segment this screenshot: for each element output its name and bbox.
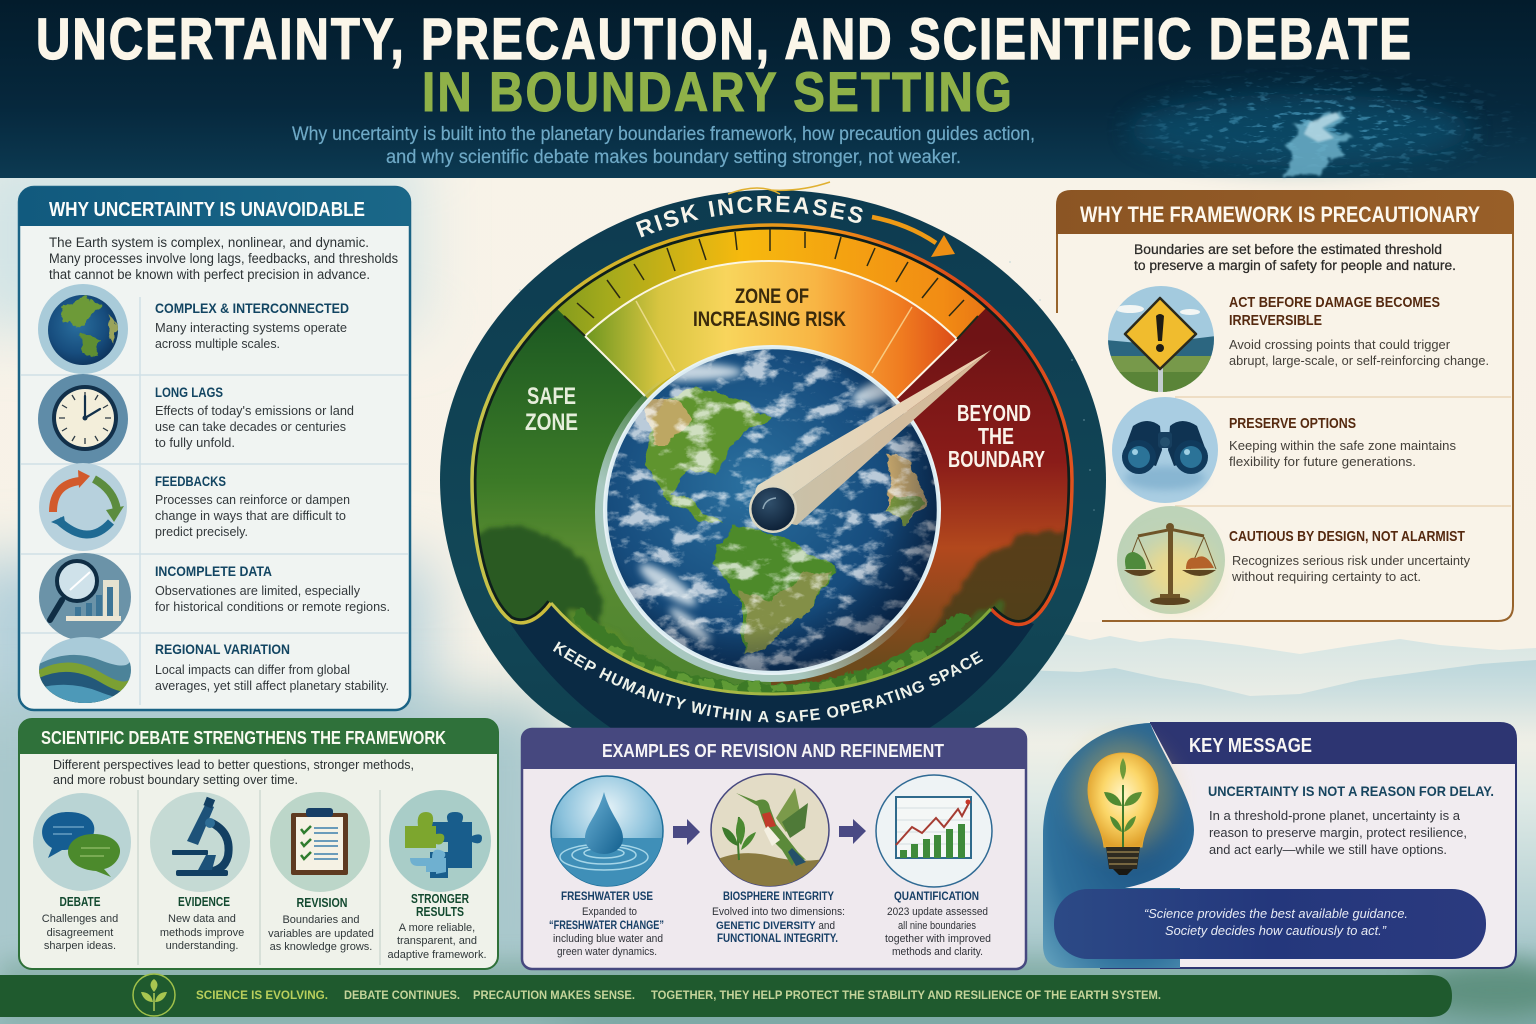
biosphere integrity text: BIOSPHERE INTEGRITY	[723, 889, 834, 903]
label: beyond the boundary: BEYOND	[957, 400, 1031, 426]
icon: clock	[38, 374, 128, 464]
icon: hummingbird	[711, 774, 830, 890]
label: beyond the boundary: THE	[978, 423, 1014, 449]
panel: examples of revision and refinement	[522, 729, 1026, 969]
biosphere integrity text: FUNCTIONAL INTEGRITY.	[717, 931, 838, 945]
gauge zones	[474, 226, 1070, 686]
biosphere integrity text: Evolved into two dimensions:	[712, 906, 845, 918]
quote pill: “Science provides the best available guidance.	[1144, 906, 1408, 921]
label: safe zone: ZONE	[525, 409, 578, 436]
revision text: REVISION	[296, 895, 348, 910]
precaution intro: to preserve a margin of safety for people and nature.	[1134, 258, 1456, 273]
left blue blob	[1043, 723, 1194, 968]
icon: balance scales	[1117, 506, 1225, 614]
revision text: as knowledge grows.	[270, 941, 372, 953]
precaution intro	[1134, 242, 1456, 273]
uncertainty intro: Many processes involve long lags, feedbacks, and thresholds	[49, 251, 398, 266]
uncertainty header	[19, 187, 410, 226]
quote pill: Society decides how cautiously to act.”	[1165, 923, 1387, 938]
icon: magnifier over data	[39, 553, 131, 641]
quantification text: all nine boundaries	[898, 920, 976, 932]
precaution intro: Boundaries are set before the estimated threshold	[1134, 242, 1442, 257]
debate text: disagreement	[47, 927, 113, 939]
icon: light bulb with sprout	[1073, 739, 1173, 875]
act before damage text: ACT BEFORE DAMAGE BECOMES	[1229, 294, 1440, 311]
freshwater use text: green water dynamics.	[557, 946, 657, 958]
long lags text: Effects of today's emissions or land	[155, 403, 354, 418]
icon: warning sign	[1105, 286, 1217, 396]
complex and interconnected text: Many interacting systems operate	[155, 320, 347, 335]
earth globe	[595, 342, 947, 682]
act before damage text: IRREVERSIBLE	[1229, 312, 1322, 329]
stronger results text: transparent, and	[397, 935, 477, 947]
icon: puzzle pieces	[389, 790, 491, 892]
stronger results text: adaptive framework.	[387, 949, 487, 961]
act before damage text	[1229, 294, 1489, 368]
precaution header	[1056, 190, 1514, 234]
debate intro: and more robust boundary setting over time.	[53, 772, 298, 787]
arrow: water to biosphere	[673, 819, 700, 845]
subtitle: Why uncertainty is built into the planetary boundaries framework, how precaution guides action,	[292, 124, 1035, 145]
evidence text: EVIDENCE	[178, 894, 230, 909]
panel: scientific debate strengthens the framework	[19, 719, 498, 969]
scribble mark above dial	[728, 182, 830, 194]
examples header: EXAMPLES OF REVISION AND REFINEMENT	[602, 741, 944, 761]
act before damage text: Avoid crossing points that could trigger	[1229, 337, 1451, 352]
label: beyond the boundary: BOUNDARY	[948, 446, 1045, 472]
stronger results text: RESULTS	[416, 904, 464, 919]
debate header	[19, 719, 498, 754]
long lags text: LONG LAGS	[155, 384, 223, 400]
debate text: Challenges and	[42, 913, 118, 925]
preserve options text: flexibility for future generations.	[1229, 454, 1416, 469]
safe zone sector	[476, 310, 771, 685]
revision text	[268, 895, 374, 953]
arrow: risk direction	[872, 217, 955, 257]
regional variation text: Local impacts can differ from global	[155, 662, 350, 677]
complex and interconnected text: COMPLEX & INTERCONNECTED	[155, 300, 349, 316]
key message body: and act early—while we still have options.	[1209, 842, 1447, 857]
quantification text	[885, 889, 991, 958]
quantification text: QUANTIFICATION	[894, 889, 979, 903]
icon: layered landscape	[39, 637, 131, 703]
feedbacks text: FEEDBACKS	[155, 473, 226, 489]
gauge lower rim	[551, 603, 991, 694]
freshwater use text	[549, 889, 664, 958]
biosphere integrity text	[712, 889, 845, 945]
incomplete data text: INCOMPLETE DATA	[155, 563, 272, 579]
beyond the boundary sector	[771, 308, 1068, 686]
evidence text: New data and	[168, 913, 236, 925]
needle hub	[749, 485, 797, 533]
uncertainty intro: that cannot be known with perfect precision in advance.	[49, 267, 370, 282]
key message body: In a threshold-prone planet, uncertainty is a	[1209, 808, 1461, 823]
freshwater use text: “FRESHWATER CHANGE”	[549, 918, 664, 932]
evidence text: understanding.	[166, 940, 238, 952]
gauge tick marks	[577, 228, 964, 318]
forest foreground	[575, 612, 965, 690]
long lags text: use can take decades or centuries	[155, 419, 346, 434]
regional variation text: averages, yet still affect planetary stability.	[155, 678, 389, 693]
label: zone of increasing risk	[693, 285, 846, 331]
biosphere integrity text: GENETIC DIVERSITY and	[716, 920, 835, 932]
icon: feedback loop	[39, 463, 127, 551]
cautious by design text: Recognizes serious risk under uncertainty	[1232, 553, 1470, 568]
regional variation text: REGIONAL VARIATION	[155, 641, 290, 657]
evidence text	[160, 894, 244, 952]
incomplete data text: Observationes are limited, especially	[155, 583, 360, 598]
key message header: KEY MESSAGE	[1189, 735, 1312, 757]
act before damage text: abrupt, large-scale, or self-reinforcing change.	[1229, 353, 1489, 368]
panel: key message	[1043, 723, 1516, 968]
icon: binoculars	[1112, 397, 1218, 503]
heading: risk increases: RISK INCREASES	[636, 196, 863, 238]
freshwater use text: FRESHWATER USE	[561, 889, 653, 903]
subtitle	[292, 124, 1035, 168]
examples header	[522, 729, 1026, 769]
freshwater use text: Expanded to	[582, 906, 637, 918]
uncertainty intro: The Earth system is complex, nonlinear, and dynamic.	[49, 235, 369, 250]
key message header	[1150, 723, 1516, 764]
key message body	[1209, 808, 1467, 857]
label: safe zone	[525, 383, 578, 436]
preserve options text: Keeping within the safe zone maintains	[1229, 438, 1456, 453]
caption: keep humanity within a safe operating space: KEEP HUMANITY WITHIN A SAFE OPERATING SPACE	[552, 641, 983, 722]
title	[36, 7, 1413, 123]
debate text: sharpen ideas.	[44, 940, 116, 952]
revision text: variables are updated	[268, 928, 374, 940]
regional variation text	[155, 641, 389, 693]
key message heading: UNCERTAINTY IS NOT A REASON FOR DELAY.	[1208, 783, 1494, 799]
incomplete data text: for historical conditions or remote regions.	[155, 599, 390, 614]
stronger results text: STRONGER	[411, 891, 469, 906]
icon: rising chart	[876, 775, 992, 887]
cautious by design text: CAUTIOUS BY DESIGN, NOT ALARMIST	[1229, 528, 1465, 545]
subtitle: and why scientific debate makes boundary setting stronger, not weaker.	[386, 147, 961, 168]
icon: water drop	[550, 776, 665, 888]
debate intro	[53, 757, 414, 787]
debate text: DEBATE	[60, 894, 101, 909]
uncertainty header: WHY UNCERTAINTY IS UNAVOIDABLE	[49, 199, 365, 221]
debate header: SCIENTIFIC DEBATE STRENGTHENS THE FRAMEWORK	[41, 728, 446, 748]
label: beyond the boundary	[948, 400, 1045, 472]
preserve options text: PRESERVE OPTIONS	[1229, 415, 1356, 432]
label: zone of increasing risk: ZONE OF	[735, 285, 809, 308]
feedbacks text: Processes can reinforce or dampen	[155, 492, 350, 507]
stronger results text	[387, 891, 487, 961]
central risk gauge	[400, 181, 1106, 728]
quantification text: methods and clarity.	[892, 946, 983, 958]
arrow: biosphere to quantification	[839, 819, 866, 844]
label: safe zone: SAFE	[527, 383, 576, 410]
caption: keep humanity within a safe operating space	[552, 607, 984, 722]
needle	[755, 350, 991, 525]
panel: why uncertainty is unavoidable	[19, 187, 410, 710]
quantification text: 2023 update assessed	[887, 906, 988, 918]
evidence text: methods improve	[160, 927, 244, 939]
panel: why the framework is precautionary	[1056, 190, 1514, 622]
feedbacks text	[155, 473, 350, 539]
revision text: Boundaries and	[282, 914, 360, 926]
quote pill	[1054, 889, 1486, 959]
icon: clipboard checklist	[270, 792, 370, 892]
footer slogan: TOGETHER, THEY HELP PROTECT THE STABILITY AND RESILIENCE OF THE EARTH SYSTEM.	[651, 988, 1161, 1002]
gauge coloured rim	[472, 225, 1072, 624]
incomplete data text	[155, 563, 390, 614]
label: zone of increasing risk: INCREASING RISK	[693, 308, 846, 331]
icon: sprout	[133, 974, 175, 1016]
title: IN BOUNDARY SETTING	[422, 60, 1014, 123]
complex and interconnected text: across multiple scales.	[155, 336, 280, 351]
feedbacks text: change in ways that are difficult to	[155, 508, 346, 523]
preserve options text	[1229, 415, 1456, 469]
footer slogan	[196, 988, 1161, 1002]
key message body: reason to preserve margin, protect resilience,	[1209, 825, 1467, 840]
debate intro: Different perspectives lead to better questions, stronger methods,	[53, 757, 414, 772]
header band	[0, 0, 1536, 178]
icon: globe	[38, 284, 128, 374]
long lags text	[155, 384, 354, 450]
cautious by design text: without requiring certainty to act.	[1231, 569, 1421, 584]
icon: microscope	[150, 792, 250, 892]
footer slogan: DEBATE CONTINUES.	[344, 988, 460, 1002]
uncertainty intro	[49, 235, 398, 282]
zone of increasing risk sector	[585, 261, 957, 398]
stronger results text: A more reliable,	[399, 922, 475, 934]
debate text	[42, 894, 118, 952]
feedbacks text: predict precisely.	[155, 524, 248, 539]
long lags text: to fully unfold.	[155, 435, 235, 450]
footer slogan: PRECAUTION MAKES SENSE.	[473, 988, 635, 1002]
quantification text: together with improved	[885, 933, 991, 945]
icon: speech bubbles	[33, 793, 131, 891]
dial navy bottom band	[510, 603, 1034, 745]
freshwater use text: including blue water and	[553, 933, 663, 945]
gauge outer dark dial	[440, 190, 1106, 745]
footer banner	[0, 974, 1452, 1017]
cautious by design text	[1229, 528, 1470, 584]
footer slogan: SCIENCE IS EVOLVING.	[196, 988, 328, 1002]
complex and interconnected text	[155, 300, 349, 351]
